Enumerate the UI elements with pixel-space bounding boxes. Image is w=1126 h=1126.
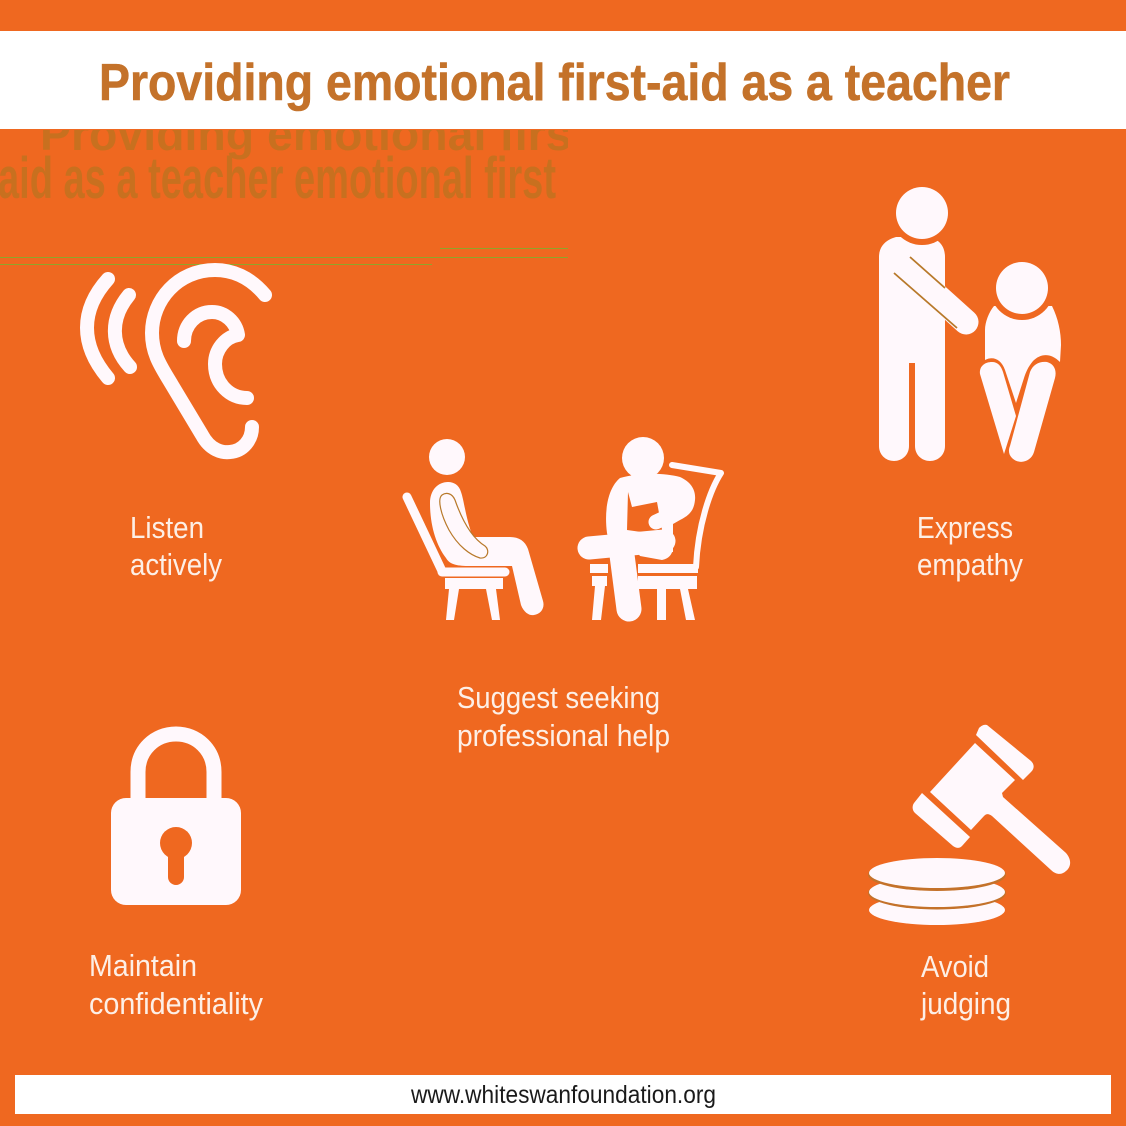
- book: [627, 492, 663, 535]
- icon: two people seated: [407, 437, 721, 620]
- label: suggest seeking professional help: Suggest seeking: [457, 680, 660, 715]
- title banner: [0, 31, 1126, 129]
- label: maintain confidentiality: [89, 948, 263, 1021]
- torso and left arm: [606, 474, 695, 560]
- ghosted title artefact: aid as a teacher emotional first: [0, 146, 556, 211]
- icon: adult comforting child: [879, 181, 1061, 462]
- label: express empathy: Express: [917, 510, 1013, 545]
- forearm: [656, 510, 682, 522]
- left chair: [407, 497, 505, 620]
- label: listen actively: [130, 510, 222, 582]
- child: [980, 256, 1061, 462]
- title: Providing emotional first-aid as a teacher: [99, 54, 1010, 112]
- label: avoid judging: judging: [920, 986, 1011, 1021]
- left person: [429, 439, 544, 615]
- label: express empathy: empathy: [917, 547, 1023, 582]
- ghosted title artefact: Providing emotional first-aid as a teacher: [40, 108, 951, 160]
- footer bar: [15, 1075, 1111, 1114]
- label: avoid judging: [920, 949, 1011, 1021]
- label: suggest seeking professional help: professional help: [457, 718, 670, 753]
- label: maintain confidentiality: confidentiality: [89, 986, 263, 1021]
- right person: [589, 437, 695, 609]
- lower leg: [622, 555, 629, 609]
- label: maintain confidentiality: Maintain: [89, 948, 197, 983]
- ghosted title artefact: [0, 130, 568, 198]
- label: suggest seeking professional help: [457, 680, 670, 753]
- label: express empathy: [917, 510, 1023, 582]
- label: listen actively: actively: [130, 547, 222, 582]
- icon: ear: [87, 270, 265, 452]
- icon: gavel: [868, 725, 1070, 925]
- label: avoid judging: Avoid: [921, 949, 989, 984]
- label: listen actively: Listen: [130, 510, 204, 545]
- crossed thigh: [589, 541, 664, 548]
- adult: [879, 181, 966, 461]
- website url: www.whiteswanfoundation.org: [410, 1081, 716, 1109]
- right chair: [590, 465, 721, 620]
- icon: padlock: [111, 734, 241, 905]
